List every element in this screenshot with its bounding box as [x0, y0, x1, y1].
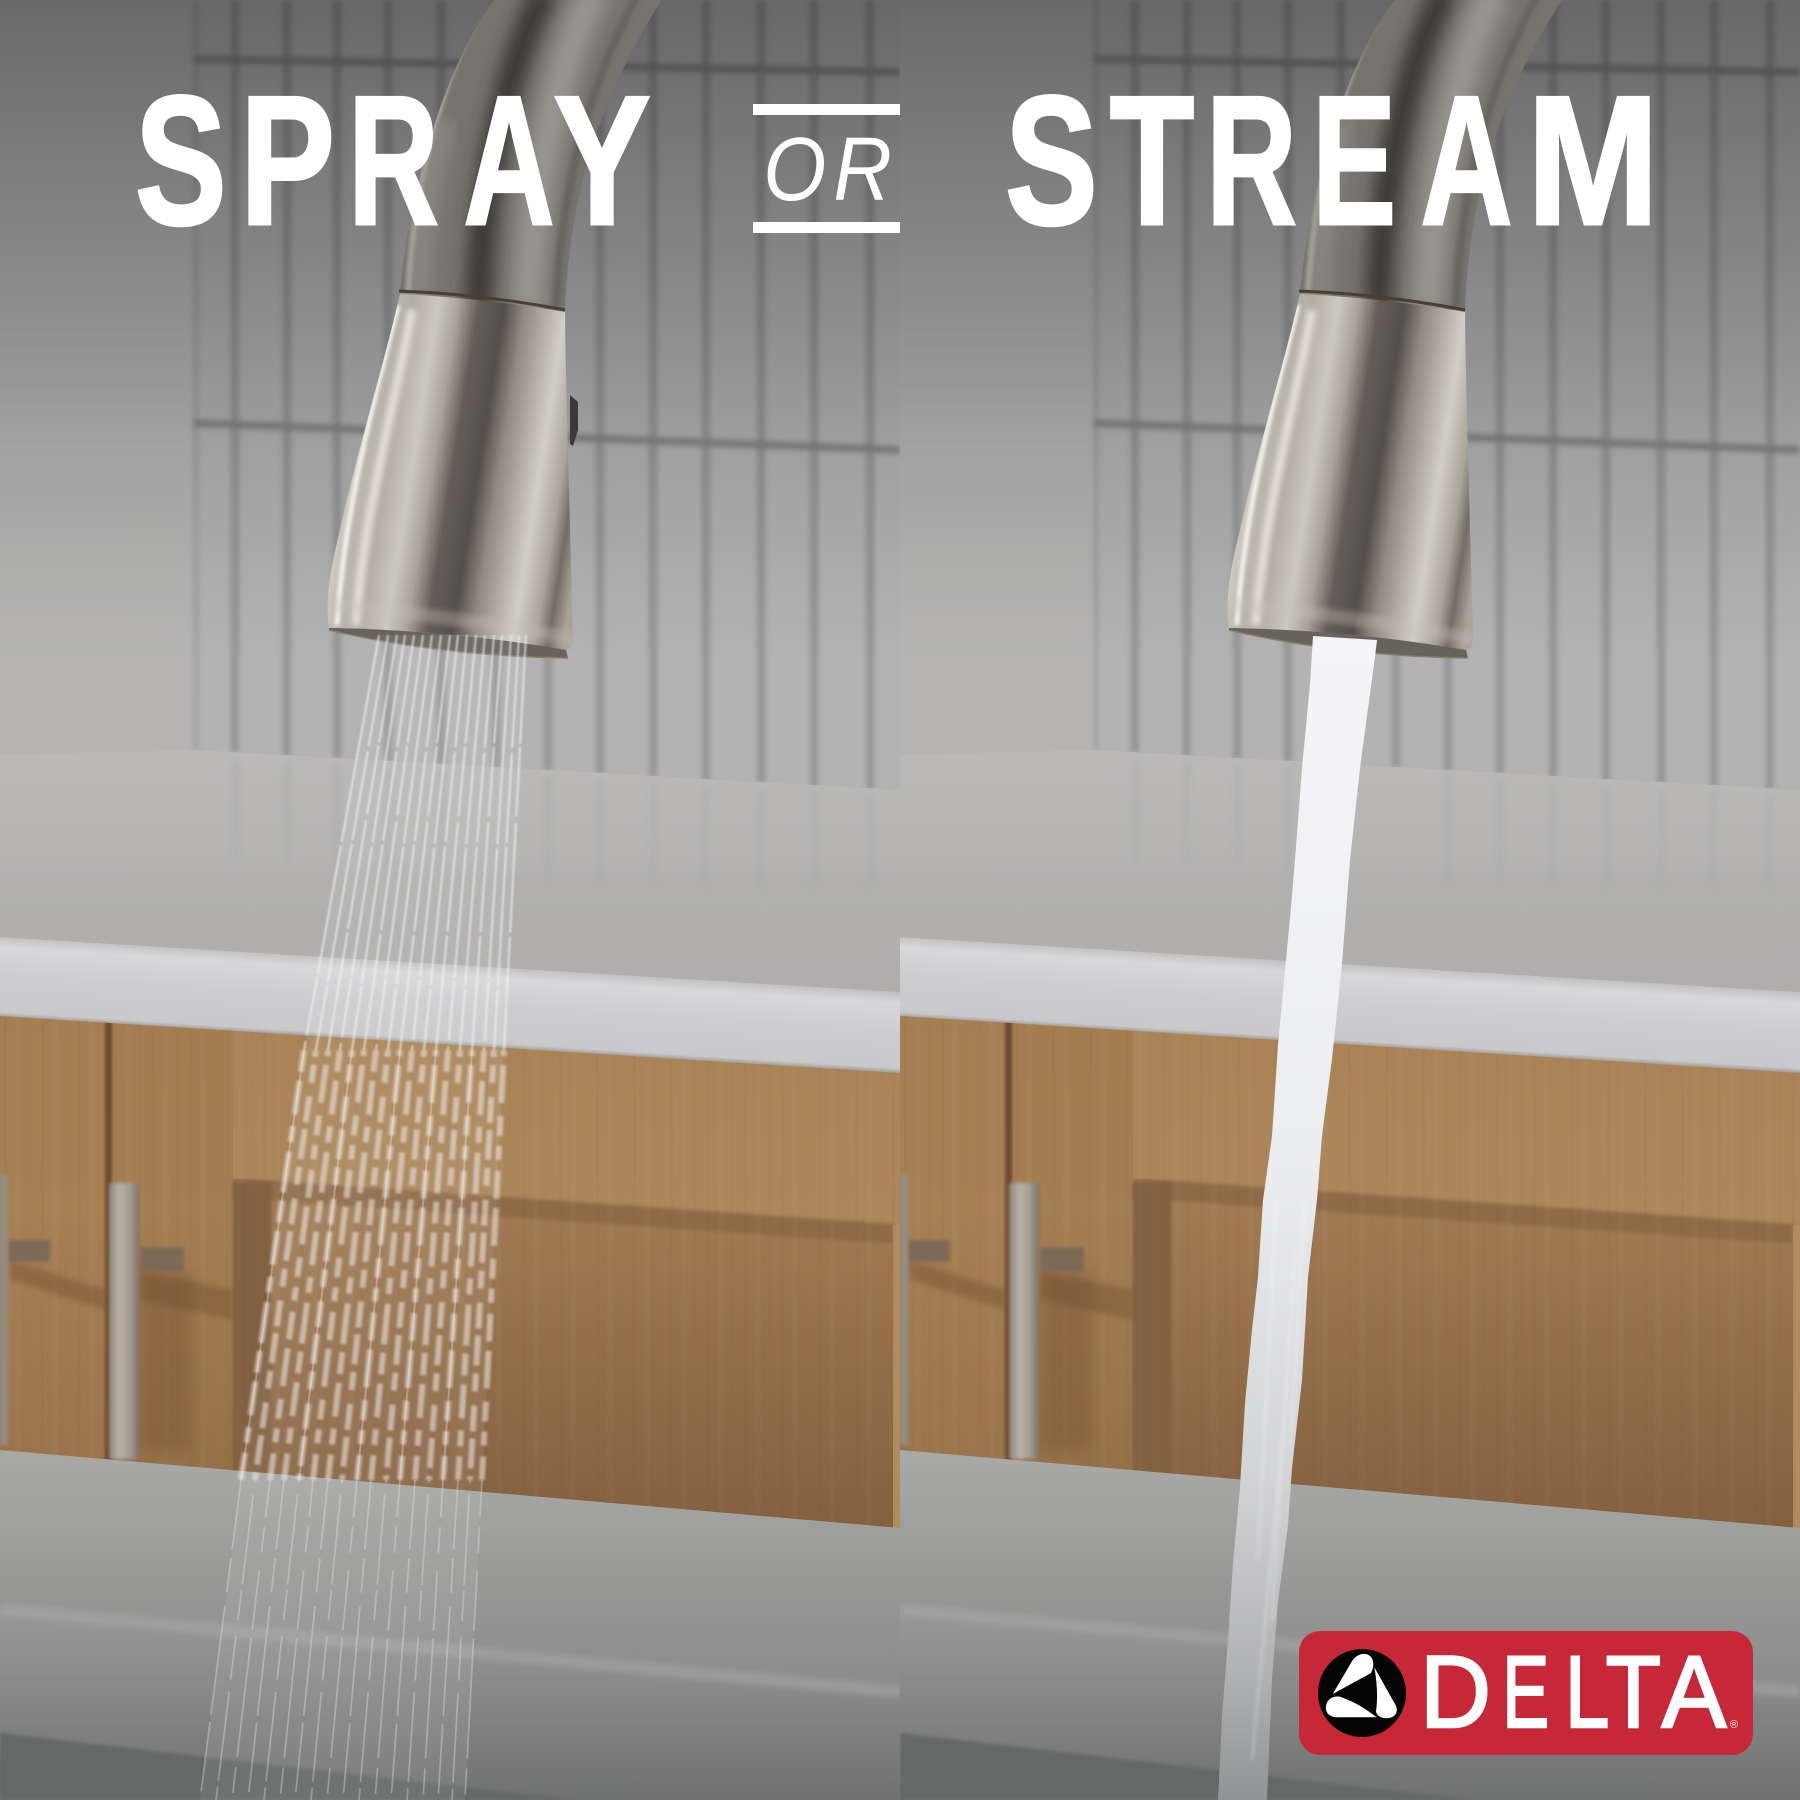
wall — [0, 0, 900, 800]
faucet neck — [400, 0, 662, 310]
tile backsplash — [193, 0, 900, 800]
faucet lever — [570, 395, 578, 446]
countertop — [0, 750, 900, 992]
title: spray: S — [135, 57, 227, 263]
top shade — [0, 0, 900, 660]
cabinet handles — [0, 1175, 233, 1459]
sink — [0, 1450, 900, 1800]
title: stream: R — [1206, 57, 1297, 263]
faucet — [328, 0, 662, 658]
middle thin streaks — [241, 1050, 472, 1480]
title: spray: P — [240, 57, 335, 263]
counter front edge — [0, 937, 900, 1073]
cabinets — [0, 1000, 900, 1550]
title: spray: A — [464, 57, 554, 263]
stream water — [1218, 636, 1377, 1800]
title: stream: S — [1005, 57, 1098, 263]
title: spray: R — [348, 57, 439, 263]
title: stream: E — [1312, 57, 1396, 263]
kitchen scene copy — [900, 0, 1800, 1800]
title: stream: A — [1420, 57, 1512, 263]
upper strands — [304, 635, 526, 1050]
icon: delta emblem — [1318, 1649, 1406, 1737]
wordmark: A — [1662, 1635, 1726, 1749]
wordmark: L — [1565, 1635, 1609, 1749]
lower strands — [200, 1480, 482, 1800]
or divider: OR — [763, 119, 892, 220]
kitchen scene with faucet — [0, 0, 900, 1800]
wordmark: D — [1420, 1635, 1491, 1749]
title: stream: T — [1110, 57, 1194, 263]
delta logo — [1299, 1631, 1753, 1755]
registered mark: ® — [1730, 1719, 1738, 1731]
or divider — [753, 104, 900, 233]
panel: spray — [0, 0, 900, 1800]
sprayer head — [328, 291, 578, 658]
wordmark: T — [1606, 1635, 1661, 1749]
title: stream: M — [1527, 57, 1659, 263]
spray water — [200, 635, 526, 1800]
middle droplets — [241, 1050, 504, 1480]
panel: stream — [900, 0, 1800, 1800]
wordmark: E — [1502, 1635, 1549, 1749]
title: spray: Y — [554, 57, 650, 263]
